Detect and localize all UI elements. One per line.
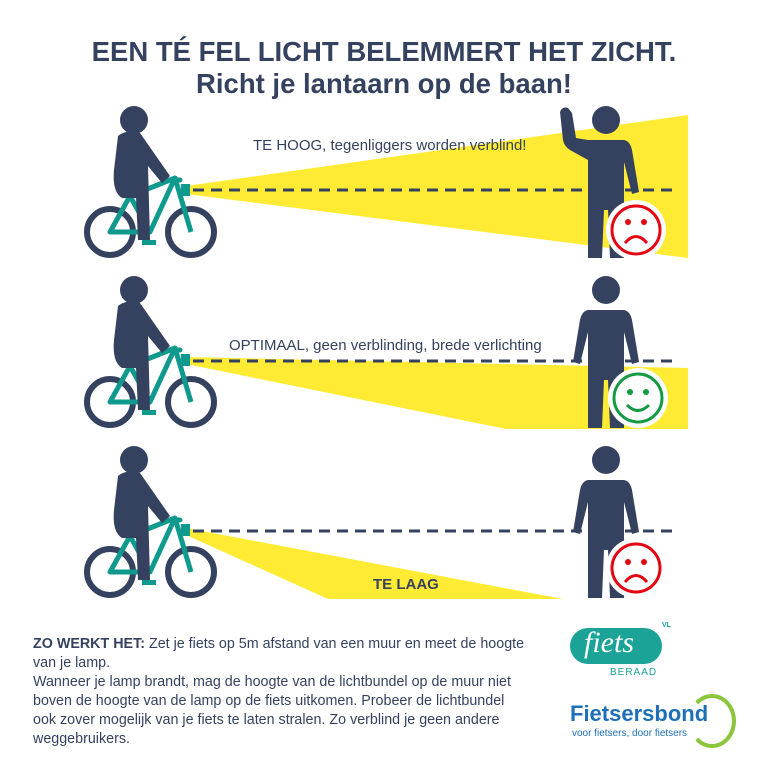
dashed lines [193, 190, 672, 531]
explanation text: van je lamp. [33, 655, 110, 671]
beam: optimal [186, 357, 688, 429]
explanation text: ZO WERKT HET: Zet je fiets op 5m afstand van een muur en meet de hoogte [33, 636, 524, 652]
explanation text: boven de hoogte van de lamp op de fiets uitkomen. Probeer de lichtbundel [33, 693, 504, 709]
title: Richt je lantaarn op de baan! [196, 68, 572, 99]
logo: fietsersbond: Fietsersbond [570, 701, 708, 726]
person row 2 [573, 276, 639, 428]
label too low: TE LAAG [373, 576, 439, 593]
explanation text: Wanneer je lamp brandt, mag de hoogte van de lichtbundel op de muur niet [33, 674, 511, 690]
beam: too high [186, 115, 688, 258]
explanation text: weggebruikers. [33, 731, 130, 747]
person waving row 1 [560, 106, 639, 258]
logo: fietsberaad: BERAAD [610, 667, 657, 678]
title: EEN TÉ FEL LICHT BELEMMERT HET ZICHT. [92, 36, 676, 67]
explanation text [33, 636, 524, 747]
logo: fietsberaad: VL [662, 622, 671, 629]
logo: fietsersbond: voor fietsers, door fietsers [572, 728, 687, 739]
person row 3 [573, 446, 639, 598]
cyclist row 2 [87, 276, 214, 425]
smiley sad row 1 [606, 200, 666, 260]
label optimal: OPTIMAAL, geen verblinding, brede verlichting [229, 337, 542, 354]
cyclist row 3 [87, 446, 214, 595]
label too high: TE HOOG, tegenliggers worden verblind! [253, 137, 526, 154]
smiley happy row 2 [608, 368, 668, 428]
logo: fietsberaad [570, 622, 671, 678]
logo: fietsberaad: fiets [584, 626, 634, 659]
cyclist row 1 [87, 106, 214, 255]
beam: too low [186, 528, 563, 599]
explanation text: ook zover mogelijk van je fiets te laten stralen. Zo verblind je geen andere [33, 712, 500, 728]
smiley sad row 3 [606, 538, 666, 598]
logo: fietsersbond [570, 694, 736, 748]
title [92, 36, 676, 99]
